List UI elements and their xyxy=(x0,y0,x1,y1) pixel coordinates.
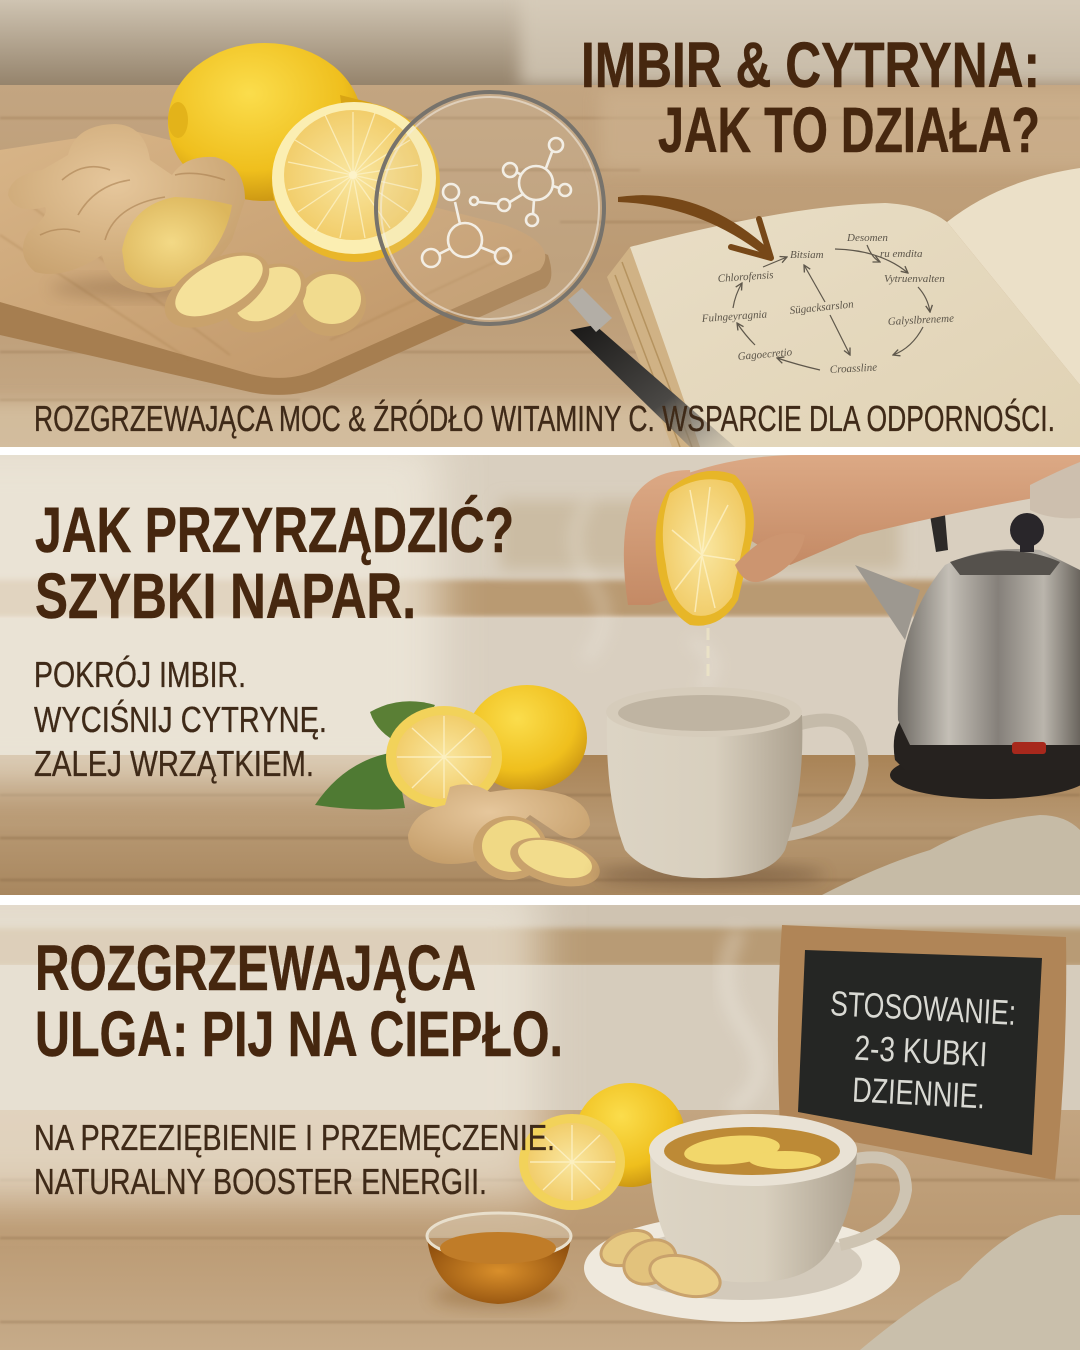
icon: ginger root xyxy=(8,124,250,298)
handwritten cycle diagram: Galyslbreneme xyxy=(888,313,954,328)
heading: ULGA: PIJ NA CIEPŁO. xyxy=(35,998,563,1070)
heading: SZYBKI NAPAR. xyxy=(35,560,416,632)
steam xyxy=(726,930,759,1110)
cloth xyxy=(860,1215,1080,1350)
handwritten cycle diagram xyxy=(700,232,954,376)
icon: ginger slices xyxy=(165,252,361,335)
icon: saucer xyxy=(584,1214,900,1322)
text block: steps xyxy=(34,654,327,784)
icon: tea cup xyxy=(649,1114,906,1282)
chalk text: DZIENNIE. xyxy=(851,1070,986,1116)
icon: whole lemon xyxy=(575,1083,685,1187)
hand squeezing lemon xyxy=(624,455,1080,680)
text block: steps: ZALEJ WRZĄTKIEM. xyxy=(34,743,314,784)
heading: ROZGRZEWAJĄCA xyxy=(35,932,476,1004)
heading xyxy=(35,932,563,1070)
icon: honey bowl xyxy=(427,1213,571,1308)
text block: uses: NA PRZEZIĘBIENIE I PRZEMĘCZENIE. xyxy=(34,1117,555,1158)
icon: lemon half xyxy=(386,706,502,808)
magnifying glass xyxy=(376,92,735,447)
chalkboard xyxy=(778,925,1066,1180)
kitchen background xyxy=(0,880,1080,1350)
open book xyxy=(607,168,1080,447)
icon: ginger xyxy=(408,784,600,886)
text block: steps: POKRÓJ IMBIR. xyxy=(34,654,246,695)
handwritten cycle diagram: Croassline xyxy=(830,362,877,376)
cloth xyxy=(822,815,1080,895)
text block: uses: NATURALNY BOOSTER ENERGII. xyxy=(34,1161,487,1202)
icon: whole lemon xyxy=(168,43,372,201)
handwritten cycle diagram: Fulngeyragnia xyxy=(700,308,768,325)
heading xyxy=(36,494,512,619)
handwritten cycle diagram: Desomen xyxy=(846,232,888,244)
chalk text: STOSOWANIE: xyxy=(829,984,1017,1033)
handwritten cycle diagram: ru emdita xyxy=(880,248,923,260)
icon: molecules xyxy=(422,138,571,267)
arrow xyxy=(618,195,772,258)
steam xyxy=(568,505,614,618)
kettle xyxy=(855,513,1080,799)
chalk text xyxy=(831,991,1014,1108)
icon: ceramic mug xyxy=(595,687,862,885)
chalk text: 2-3 KUBKI xyxy=(853,1029,988,1074)
cutting board xyxy=(0,130,551,395)
handwritten cycle diagram: Gagoecretio xyxy=(737,346,793,363)
handwritten cycle diagram: Sügacksarslon xyxy=(789,298,855,317)
handwritten cycle diagram: Vytruenvalten xyxy=(884,273,945,285)
kitchen background xyxy=(0,0,1080,472)
handwritten cycle diagram: Bitsiam xyxy=(790,249,824,261)
icon: whole lemon xyxy=(467,685,587,791)
icon: ginger slices xyxy=(600,1228,722,1298)
title xyxy=(584,42,1038,153)
icon: lemon half squeezed xyxy=(656,471,754,626)
heading: JAK PRZYRZĄDZIĆ? xyxy=(35,494,514,566)
text block: steps: WYCIŚNIJ CYTRYNĘ. xyxy=(34,698,327,740)
kitchen background xyxy=(0,440,1080,895)
panel: how it works xyxy=(0,0,1080,472)
icon: lemon half xyxy=(519,1114,625,1210)
panel: warming relief xyxy=(0,880,1080,1350)
text block: uses xyxy=(34,1117,555,1202)
icon: lemon half xyxy=(272,102,440,262)
panel: preparation xyxy=(0,440,1080,895)
icon: leaves xyxy=(315,701,435,809)
handwritten cycle diagram: Chlorofensis xyxy=(717,269,774,285)
